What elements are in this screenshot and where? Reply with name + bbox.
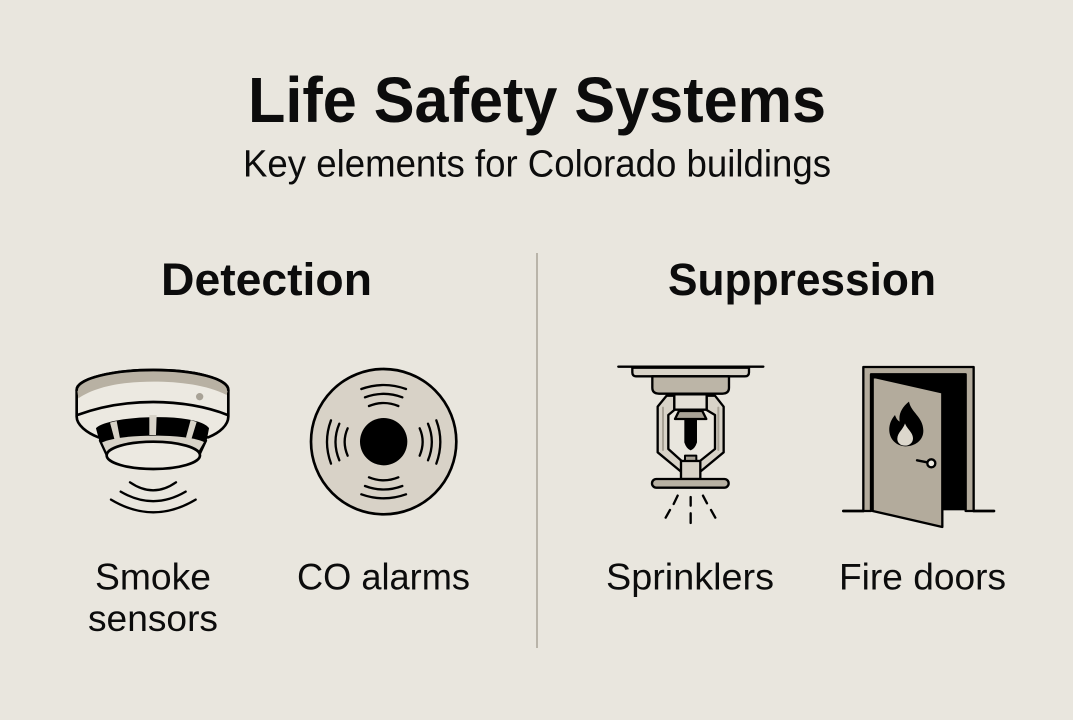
- icon: CO alarm: [311, 369, 456, 514]
- heading: suppression: Suppression: [668, 254, 936, 305]
- panel: detection: [77, 254, 470, 639]
- panel: suppression: [606, 254, 1006, 598]
- icon: fire door: [843, 367, 994, 527]
- label: smoke sensors: sensors: [88, 598, 218, 639]
- label: CO alarms: CO alarms: [297, 556, 470, 598]
- heading: detection: Detection: [161, 254, 372, 305]
- label: fire doors: Fire doors: [839, 556, 1006, 598]
- subtitle: Key elements for Colorado buildings: [243, 144, 831, 186]
- title: Life Safety Systems: [248, 64, 826, 136]
- icon: smoke sensor: [77, 370, 228, 512]
- label: smoke sensors: Smoke: [95, 556, 211, 598]
- icon: sprinkler: [618, 367, 763, 523]
- label: sprinklers: Sprinklers: [606, 556, 774, 598]
